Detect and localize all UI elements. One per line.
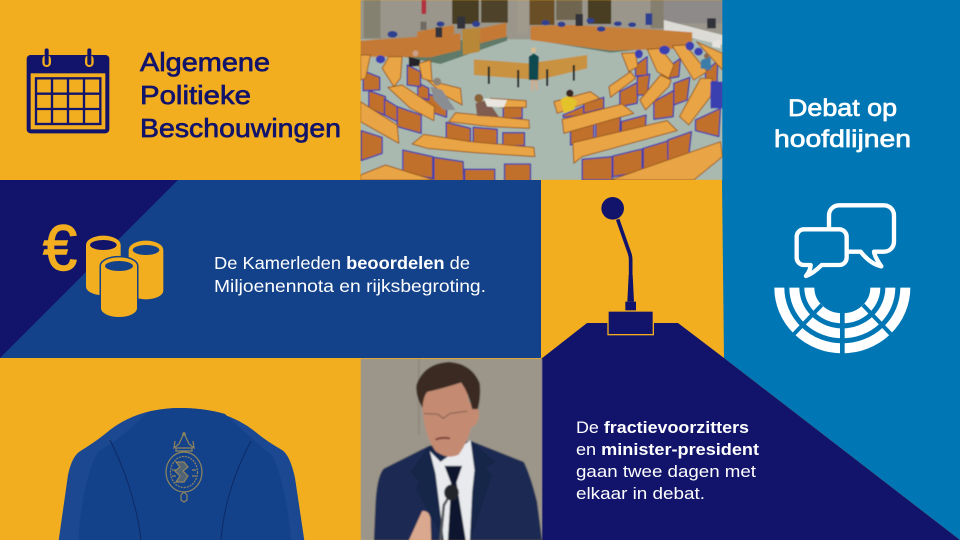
text: fractievoorzitters debate: De fractievoorzitters xyxy=(576,418,749,437)
heading: title: Algemene xyxy=(140,47,270,77)
icon: speech bubbles xyxy=(797,205,894,276)
heading: debat op hoofdlijnen xyxy=(774,95,911,153)
text: kamerleden beoordelen xyxy=(214,253,486,296)
icon: calendar xyxy=(27,48,109,133)
panel: navy stage and debate text xyxy=(541,323,960,540)
heading: title: Politieke xyxy=(140,80,251,110)
text: fractievoorzitters debate: elkaar in debat. xyxy=(576,484,705,503)
photo: minister-president at microphone xyxy=(360,358,542,540)
icon: microphone on lectern xyxy=(601,197,653,335)
icon: coat of arms xyxy=(166,433,202,502)
icon: coin stacks xyxy=(86,236,163,317)
icon: parliament seating xyxy=(779,288,905,357)
panel: blue budget band xyxy=(0,180,541,358)
icon: euro sign: € xyxy=(43,212,77,284)
text: kamerleden beoordelen: Miljoenennota en rijksbegroting. xyxy=(214,276,486,296)
photo: plenary chamber xyxy=(360,0,722,182)
heading: debat op hoofdlijnen: Debat op xyxy=(788,95,897,122)
panel: chair with coat of arms xyxy=(58,408,305,540)
heading: title: Beschouwingen xyxy=(140,113,341,143)
panel: top left yellow title block xyxy=(0,0,360,180)
heading: title xyxy=(140,47,341,143)
heading: debat op hoofdlijnen: hoofdlijnen xyxy=(774,126,911,153)
text: fractievoorzitters debate xyxy=(576,418,759,503)
panel: right blue column xyxy=(722,0,960,540)
text: fractievoorzitters debate: gaan twee dagen met xyxy=(576,462,756,481)
text: kamerleden beoordelen: De Kamerleden beoordelen de xyxy=(214,253,470,273)
text: fractievoorzitters debate: en minister-president xyxy=(576,440,759,459)
